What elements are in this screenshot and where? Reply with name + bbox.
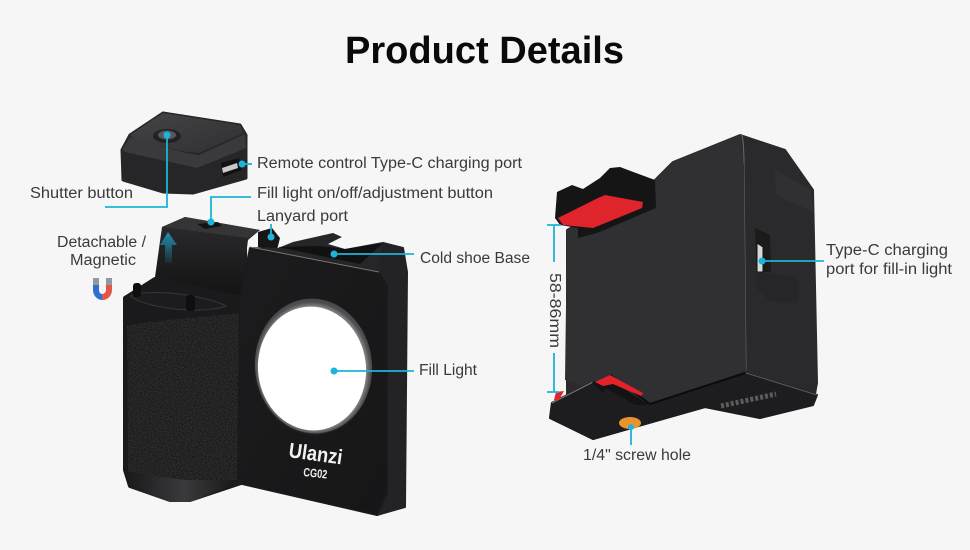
- bottom red clamp: [595, 375, 643, 396]
- callout: fill light: [330, 362, 478, 379]
- top clamp: [555, 167, 656, 238]
- callout: cold shoe base: [330, 250, 530, 267]
- port flap: [757, 273, 797, 302]
- camera grip and fill light body: [125, 217, 407, 515]
- rating marks: [721, 394, 776, 406]
- lanyard post: [258, 228, 280, 250]
- callout: lanyard port: Lanyard port: [257, 208, 349, 225]
- callout: screw hole: [583, 424, 691, 464]
- callout: type-c charging port: port for fill-in light: [826, 261, 953, 278]
- top surface and cold shoe: [250, 233, 403, 284]
- fill light button: [197, 222, 222, 229]
- screw hole: [619, 417, 641, 429]
- bottom plate: [550, 373, 817, 439]
- right device: phone clamp back: [550, 135, 817, 439]
- label: detachable magnetic: Detachable /: [57, 234, 147, 251]
- callout: type-c charging port: Type-C charging: [826, 242, 948, 259]
- callout: fill light button: [208, 185, 493, 226]
- back face: [565, 135, 746, 405]
- detachable top block: [155, 217, 260, 297]
- side recess: [775, 170, 813, 212]
- logo: Ulanzi: [287, 439, 344, 469]
- callout: fill light: Fill Light: [419, 362, 478, 379]
- side edge: [377, 243, 407, 515]
- title: Product Details: [345, 30, 624, 72]
- callout: shutter button: Shutter button: [30, 185, 133, 202]
- callout: type-c charging port: [758, 242, 953, 278]
- grip bottom ridge: [128, 472, 240, 502]
- callout: screw hole: 1/4" screw hole: [583, 447, 691, 464]
- callout: fill light button: Fill light on/off/adjustment button: [257, 185, 493, 202]
- callout: shutter button: [30, 132, 170, 207]
- icon: upward arrow: [160, 232, 177, 263]
- leather texture: [127, 313, 240, 480]
- side face: [740, 135, 817, 410]
- callout: remote charging port: Remote control Type-C charging port: [257, 155, 523, 172]
- grip top rim: [130, 293, 226, 310]
- grip: [125, 279, 241, 500]
- top red clamp lever: [558, 195, 643, 228]
- callout: cold shoe base: Cold shoe Base: [420, 250, 530, 267]
- remote shutter module: [122, 113, 246, 193]
- label: detachable magnetic: [57, 234, 147, 269]
- dimension: clamp range: 58-86mm: [546, 273, 563, 348]
- type-c port recess: [755, 228, 771, 272]
- light disc: [252, 301, 372, 436]
- dimension: clamp range: [546, 225, 563, 392]
- label: detachable magnetic: Magnetic: [70, 252, 136, 269]
- model: CG02: [303, 465, 328, 482]
- front panel: [238, 248, 387, 515]
- light ring: [248, 293, 379, 439]
- callout: lanyard port: [257, 208, 349, 240]
- icon: magnet: [93, 278, 112, 300]
